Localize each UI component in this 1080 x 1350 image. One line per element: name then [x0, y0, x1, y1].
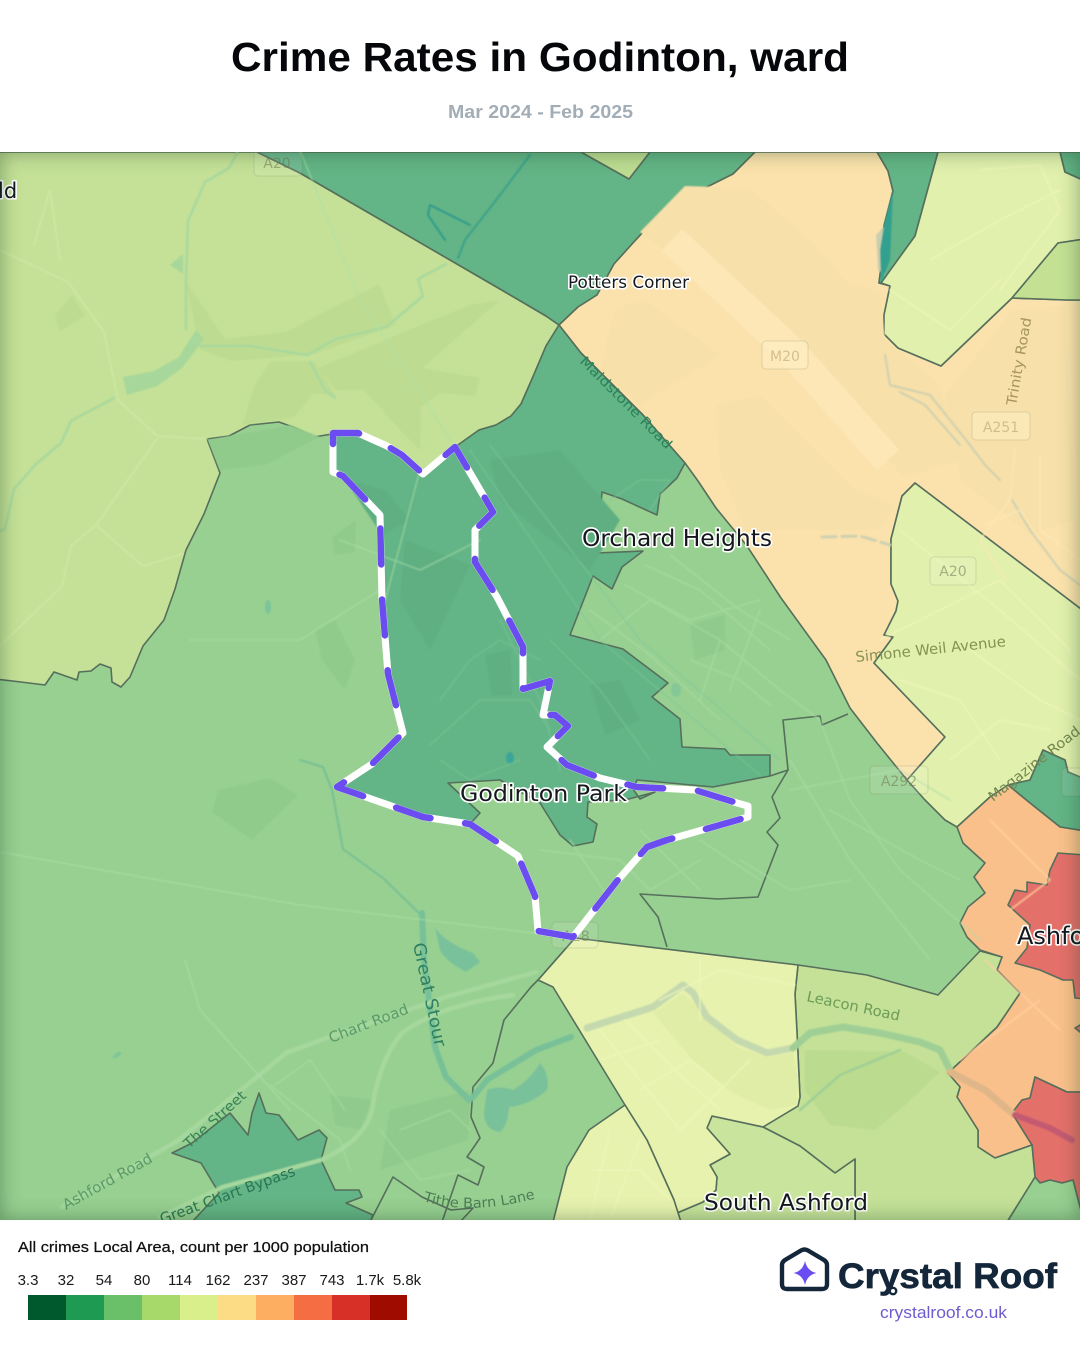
- road name: Chart Road: Chart Road: [327, 1002, 411, 1047]
- legend scale values: 114: [168, 1272, 192, 1289]
- place label: Potters Corner: Potters Corner: [568, 273, 689, 292]
- river name: Great Stour: Great Stour: [408, 941, 450, 1049]
- road network: [0, 150, 1080, 1220]
- logo wordmark: Crystal Roof: [838, 1257, 1057, 1296]
- legend scale values: 80: [134, 1272, 150, 1289]
- shield: A28: A28: [562, 929, 590, 945]
- area: narrow dark green strip: [877, 152, 938, 283]
- area: Ashford orange: [948, 785, 1080, 1158]
- legend: [18, 1239, 422, 1320]
- road name: The Street: The Street: [180, 1088, 250, 1153]
- legend title: All crimes Local Area, count per 1000 population: [18, 1239, 369, 1256]
- shield: A20 north: A20: [263, 156, 291, 172]
- area: small red sliver at right edge: [1074, 1024, 1080, 1033]
- area: small light green notch at top: [581, 152, 650, 179]
- legend scale values: 32: [58, 1272, 74, 1289]
- area: north-west light green: [0, 152, 559, 687]
- area: north-east mid green: [1012, 239, 1080, 300]
- area: east pale: [874, 483, 1080, 827]
- area: South Ashford light green: [677, 1116, 855, 1222]
- area: central north dark green including ward core: [333, 325, 770, 846]
- website address: crystalroof.co.uk: [880, 1304, 1008, 1322]
- icon: keyhole tail on y: [890, 1288, 896, 1294]
- road name: Maidstone Road: Maidstone Road: [576, 354, 675, 453]
- shield: A20 east: A20: [939, 564, 967, 580]
- choropleth map: [0, 152, 1080, 1220]
- road name: Great Chart Bypass: Great Chart Bypass: [158, 1164, 298, 1228]
- road name: Trinity Road: Trinity Road: [1004, 316, 1035, 408]
- area: Ashford centre red: [1008, 853, 1080, 999]
- area: Ashford south red: [1012, 1077, 1080, 1210]
- shield: A292: A292: [881, 774, 917, 790]
- outlines: inner medium green boundaries: [370, 714, 848, 1222]
- legend scale values: [18, 1272, 422, 1289]
- area: top right dark corner: [1060, 152, 1080, 181]
- legend scale values: 3.3: [18, 1272, 38, 1289]
- road and river names: [64, 318, 1080, 1268]
- road name: Tithe Barn Lane: Tithe Barn Lane: [426, 1191, 534, 1208]
- legend colour bar: [28, 1295, 407, 1320]
- shaded fields and land use: [208, 185, 938, 1129]
- area: south-east green corner: [1007, 1177, 1080, 1222]
- water: rivers and lakes: [0, 153, 1080, 1140]
- legend scale values: 387: [281, 1272, 307, 1289]
- legend scale values: 237: [243, 1272, 269, 1289]
- area: Leacon Road light green: [763, 951, 1035, 1222]
- area: Great Chart dark green: [172, 1093, 373, 1222]
- subtitle: date range: Mar 2024 - Feb 2025: [448, 101, 633, 122]
- place label: Godinton Park: Godinton Park: [460, 782, 627, 807]
- shield: M20: M20: [770, 349, 800, 365]
- legend scale values: 743: [319, 1272, 345, 1289]
- area: Magazine Road dark green: [1008, 750, 1080, 831]
- area: south central pale: [538, 938, 800, 1213]
- legend scale values: 5.8k: [393, 1272, 422, 1289]
- place label: South Ashford: South Ashford: [704, 1191, 868, 1216]
- legend scale values: 1.7k: [356, 1272, 385, 1289]
- shield: A251: A251: [983, 420, 1019, 436]
- title: Crime Rates in Godinton, ward: [231, 34, 849, 80]
- road name: Ashford Road: Ashford Road: [60, 1151, 155, 1213]
- road name: Leacon Road: Leacon Road: [805, 989, 901, 1025]
- area: M20 pale orange: [559, 152, 1080, 780]
- logo: Crystal Roof: [782, 1250, 1057, 1322]
- road name: Simone Weil Avenue: Simone Weil Avenue: [855, 634, 1007, 666]
- area: north-east pale: [881, 152, 1080, 366]
- place label: Orchard Heights: Orchard Heights: [582, 526, 772, 552]
- road shields: [254, 148, 1080, 948]
- legend scale values: 162: [205, 1272, 231, 1289]
- area: northern dark green: [257, 152, 755, 325]
- road name: Magazine Road: Magazine Road: [986, 724, 1080, 805]
- legend scale values: 54: [96, 1272, 112, 1289]
- ward boundary: Godinton: [333, 433, 748, 937]
- place labels: [0, 179, 1080, 1216]
- area: south pale wedge: [553, 1105, 681, 1222]
- icon: house with crystal star: [782, 1250, 827, 1289]
